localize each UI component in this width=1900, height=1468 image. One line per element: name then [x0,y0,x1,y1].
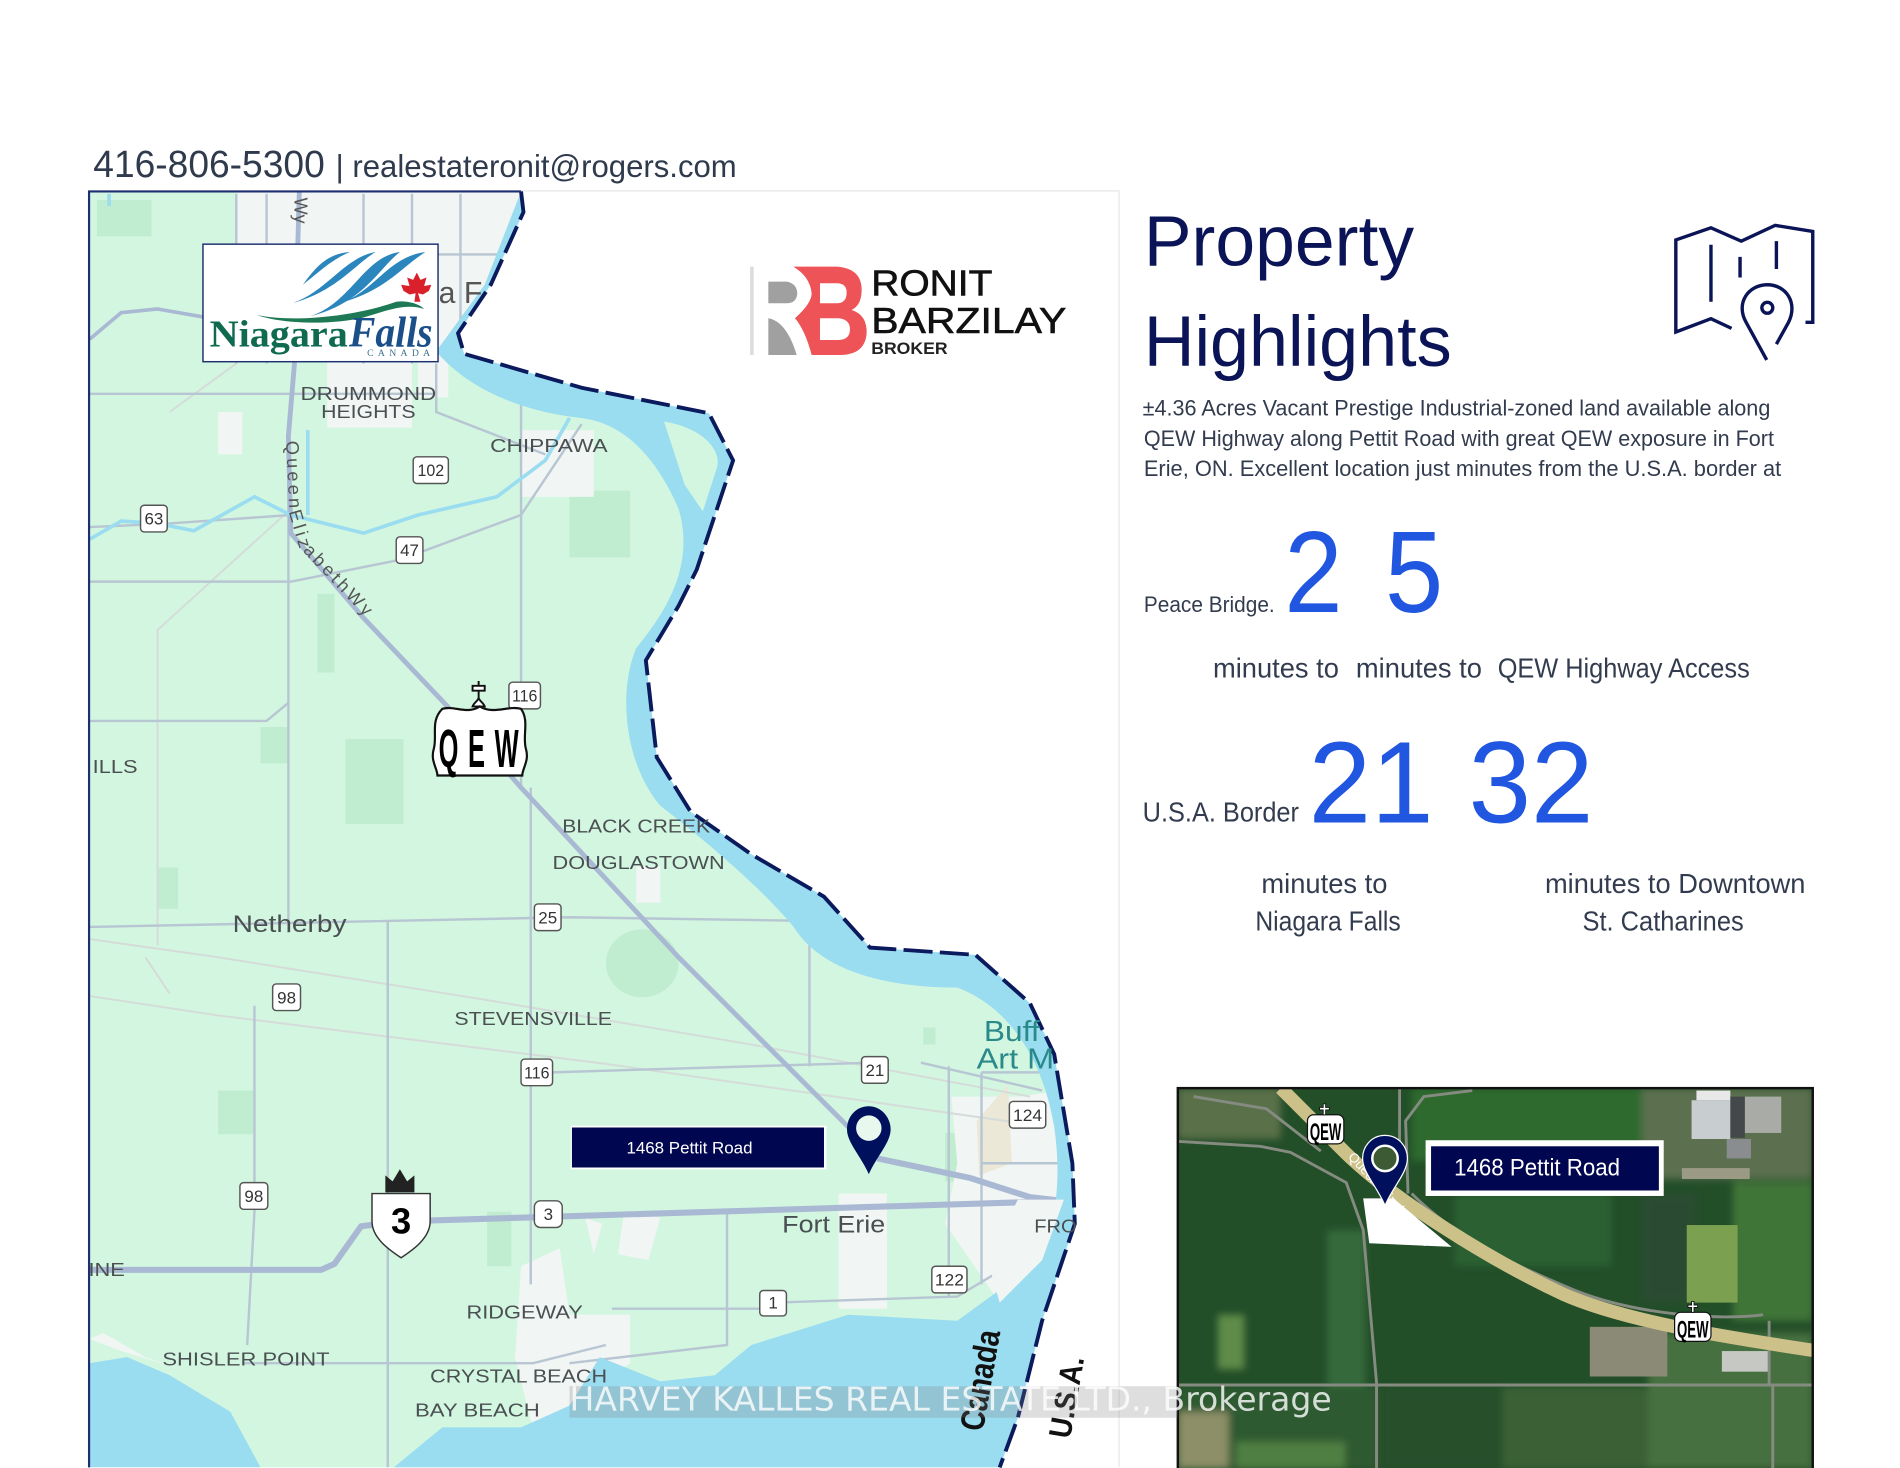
map place labels: DRUMMOND [301,384,436,404]
river and lake [394,191,1091,1468]
logo swoosh [257,301,424,323]
boundary dashed line [458,191,1075,1467]
stat: 21 and 32 minutes: minutes to Downtown [1545,868,1805,899]
map place labels: CRYSTAL BEACH [430,1367,607,1387]
map place labels: INE [88,1260,125,1280]
icon: map with pin [1676,225,1813,360]
highway route markers: 1 [768,1294,778,1313]
panel: regional map [88,190,1091,1468]
map left and top border [89,191,521,1467]
aerial address label [1426,1140,1664,1196]
map place labels: Canada [953,1326,1008,1434]
stat: 2 and 5 minutes: 5 [1385,507,1443,637]
river island [664,422,718,511]
map place labels: U.S.A. [1041,1353,1091,1441]
stat: 21 and 32 minutes: minutes to [1261,868,1387,899]
map place labels: BAY BEACH [415,1401,540,1421]
highway route markers: 122 [935,1271,964,1290]
map land [90,191,1095,1468]
yard lot [1590,1327,1667,1377]
map place labels: Buff [984,1016,1041,1048]
aerial map pin [1363,1135,1407,1206]
map place labels: Netherby [233,911,348,938]
map place labels: BLACK CREEK [562,816,710,836]
heading: Property Highlights [1144,201,1452,382]
Fort Erie urban over shoreline [988,1200,1064,1303]
text block: description: ±4.36 Acres Vacant Prestige Industrial-zoned land available along [1143,396,1770,421]
heading: Property Highlights: Property [1144,201,1414,281]
sandy urban tint [977,1084,1012,1175]
logo: Ronit Barzilay: RONIT [871,263,992,304]
stat: 21 and 32 minutes [1143,718,1805,937]
map pin: location [847,1106,891,1174]
map place labels: a F [439,277,482,310]
logo: Ronit Barzilay: BROKER [871,339,948,358]
aerial QEW shield bottom: QEW [1677,1317,1709,1344]
highway route markers: 3 [544,1205,553,1224]
highway route markers: 47 [400,541,419,560]
highway route markers: 63 [144,510,163,529]
address label: 1468 Pettit Road [626,1139,752,1158]
logo: Ronit Barzilay: BARZILAY [871,300,1066,341]
aerial QEW shield top: QEW [1310,1119,1341,1146]
logo: Niagara Falls [203,244,438,362]
highway route markers: 21 [865,1061,884,1080]
panel: map frame line [521,191,1119,1467]
highway route markers: 102 [417,461,444,480]
highway route markers: 116 [524,1063,550,1082]
main highways [90,191,1072,1270]
creeks [90,194,570,539]
map place labels: Fort Erie [782,1211,885,1238]
stat: 2 and 5 minutes: minutes to [1356,652,1482,683]
stat: 2 and 5 minutes: minutes to [1213,652,1339,683]
logo waves [293,252,425,316]
green park patches [97,200,975,1266]
text block: description [1143,396,1782,617]
industrial buildings [1682,1091,1781,1179]
logo: Niagara Falls: CANADA [367,348,430,359]
icon: highway 3 crown shield [372,1169,430,1258]
map place labels: Wy [290,198,310,224]
map place labels: CHIPPAWA [490,436,609,456]
heading: Property Highlights: Highlights [1144,302,1452,382]
property parcel [1363,1198,1452,1247]
map place labels: DOUGLASTOWN [553,853,725,873]
icon: QEW highway shield: QEW [439,718,519,779]
icon: QEW highway shield [433,681,527,779]
maple leaf [401,273,431,302]
forest base [1178,1088,1813,1468]
text block: description: QEW Highway along Pettit Road with great QEW exposure in Fort [1144,426,1775,451]
map place labels: FRO [1034,1216,1077,1236]
highway route markers: 98 [277,988,296,1007]
map place labels: Art M [977,1044,1054,1076]
RB monogram [768,267,867,355]
contact line [93,143,737,185]
field [1687,1225,1738,1303]
logo: Niagara Falls: Niagara [210,315,348,356]
map place labels: STEVENSVILLE [454,1009,612,1029]
map place labels: HEIGHTS [321,402,416,422]
stat: 21 and 32 minutes: U.S.A. Border [1143,797,1299,828]
icon: highway 3 crown shield: 3 [391,1201,411,1242]
stat: 21 and 32 minutes: Niagara Falls [1255,906,1401,937]
contact line: | realestateronit@rogers.com [336,148,737,184]
aerial QEW shield top [1307,1104,1344,1146]
stat: 2 and 5 minutes: 2 [1284,507,1343,637]
stat: 21 and 32 minutes: St. Catharines [1583,906,1744,937]
aerial QEW shield bottom [1675,1301,1711,1344]
urban patches [90,191,1066,1430]
highway route markers: 116 [512,687,537,706]
minor roads [90,194,1060,1467]
highway route markers [141,457,1046,1316]
west lake [90,1357,261,1467]
map place labels [88,198,1091,1441]
watermark: brokerage: HARVEY KALLES REAL ESTATE LTD., Brokerage [570,1380,1332,1418]
highway route markers: 124 [1013,1106,1042,1125]
stat: 2 and 5 minutes: QEW Highway Access [1498,652,1750,683]
aerial photo panel: Queen Elizabeth Wy [1345,1149,1438,1250]
local roads [1178,1088,1813,1468]
minor rail lines [90,364,1030,1124]
highway route markers: 98 [244,1187,263,1206]
blurred land patches [1178,1088,1813,1468]
text block: description: Peace Bridge. [1144,592,1275,617]
map place labels: RIDGEWAY [467,1302,583,1322]
stat: 21 and 32 minutes: 32 [1469,718,1593,848]
contact line: 416-806-5300 [93,143,325,185]
aerial address label: 1468 Pettit Road [1454,1154,1620,1181]
text block: description: Erie, ON. Excellent location just minutes from the U.S.A. border at [1144,456,1782,481]
stat: 2 and 5 minutes [1213,507,1750,683]
map place labels: ILLS [93,757,138,777]
address label [571,1126,826,1169]
aerial photo panel [1178,1088,1818,1468]
logo: Ronit Barzilay [750,263,1066,358]
map place labels: SHISLER POINT [162,1350,330,1370]
logo: Niagara Falls: Falls [348,309,433,357]
map place labels: QueenElizabethWy [283,442,372,615]
highway route markers: 25 [538,908,557,927]
stat: 21 and 32 minutes: 21 [1309,718,1433,848]
highway [1281,1088,1818,1351]
